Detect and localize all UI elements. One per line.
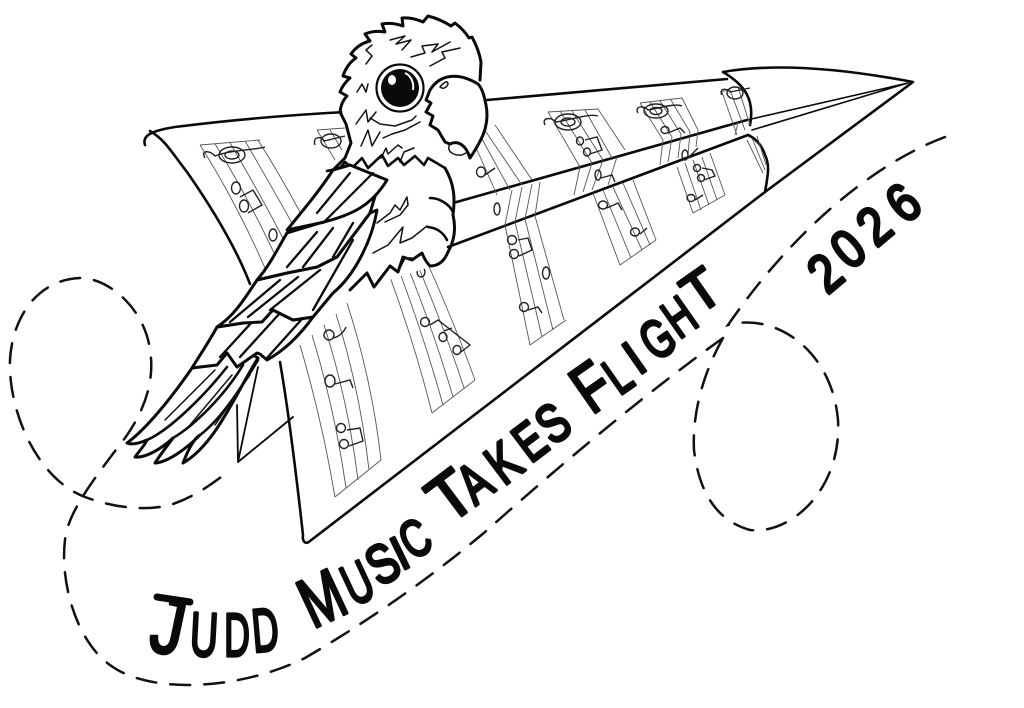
staves [200, 87, 766, 497]
parrot: head feather details [356, 36, 460, 162]
word: Judd: U [188, 599, 220, 670]
word: Takes [413, 392, 582, 537]
wing: tier 1 [287, 165, 387, 230]
year: 2026: 0 [819, 218, 877, 280]
stave: nose [722, 87, 766, 173]
word: Flight: I [614, 332, 656, 385]
wing: tier 2 [257, 190, 377, 280]
plane: nose [723, 67, 913, 192]
word: Music: C [389, 506, 441, 571]
word: Judd: J [143, 578, 194, 674]
word: Judd [143, 578, 281, 674]
word: Flight: H [651, 284, 708, 349]
word: Judd: D [249, 594, 281, 665]
title: Judd Music Takes Flight [143, 256, 732, 674]
word: Music: M [286, 554, 357, 642]
word: Music: S [355, 530, 411, 598]
parrot: head fur outline [333, 16, 481, 170]
wing: tier 3 [217, 210, 377, 327]
wing: tail feathers [127, 340, 258, 463]
word: Flight: F [557, 346, 627, 427]
music notes [232, 126, 715, 448]
word: Takes: S [525, 392, 582, 456]
treble clefs [204, 87, 750, 163]
word: Flight [557, 256, 732, 427]
word: Takes: T [413, 455, 488, 537]
word: Music: U [332, 549, 384, 619]
plane: lower wing [280, 192, 765, 543]
stave: top 4 [548, 109, 656, 265]
plane: left rear fold [237, 367, 293, 462]
word: Music: I [383, 527, 417, 580]
year: 2026: 6 [874, 172, 932, 234]
word: Takes: E [501, 409, 558, 473]
parrot: beak [426, 76, 487, 158]
parrot [127, 16, 487, 463]
parrot: head and body fill [333, 22, 487, 292]
wing: tier 4 [192, 310, 313, 368]
word: Flight: L [592, 345, 643, 405]
plane: upper wing outline [144, 79, 727, 145]
stave: upper left [200, 140, 300, 268]
dashed flight path: right loop [694, 137, 945, 530]
stave: top centre [317, 125, 566, 345]
stave: top 5 [640, 98, 725, 213]
word: Flight: G [628, 306, 687, 372]
parrot: wing feathers [127, 165, 387, 463]
year: 2026 [796, 172, 932, 304]
plane: central fold [448, 120, 748, 247]
paper airplane [144, 67, 913, 543]
word: Music [286, 506, 441, 642]
word: Judd: D [224, 601, 250, 669]
stave: lower centre [390, 262, 475, 413]
year: 2026: 2 [845, 195, 903, 257]
parrot: chest [327, 155, 455, 290]
stave: lower left [300, 303, 381, 497]
year: 2026: 2 [796, 242, 854, 304]
dashed flight path: long swoop and left loop [10, 278, 723, 685]
word: Flight: T [670, 256, 732, 325]
plane: left wing edge [150, 131, 250, 284]
parrot: eye [376, 64, 424, 112]
word: Takes: A [446, 450, 505, 516]
word: Takes: K [474, 430, 534, 496]
